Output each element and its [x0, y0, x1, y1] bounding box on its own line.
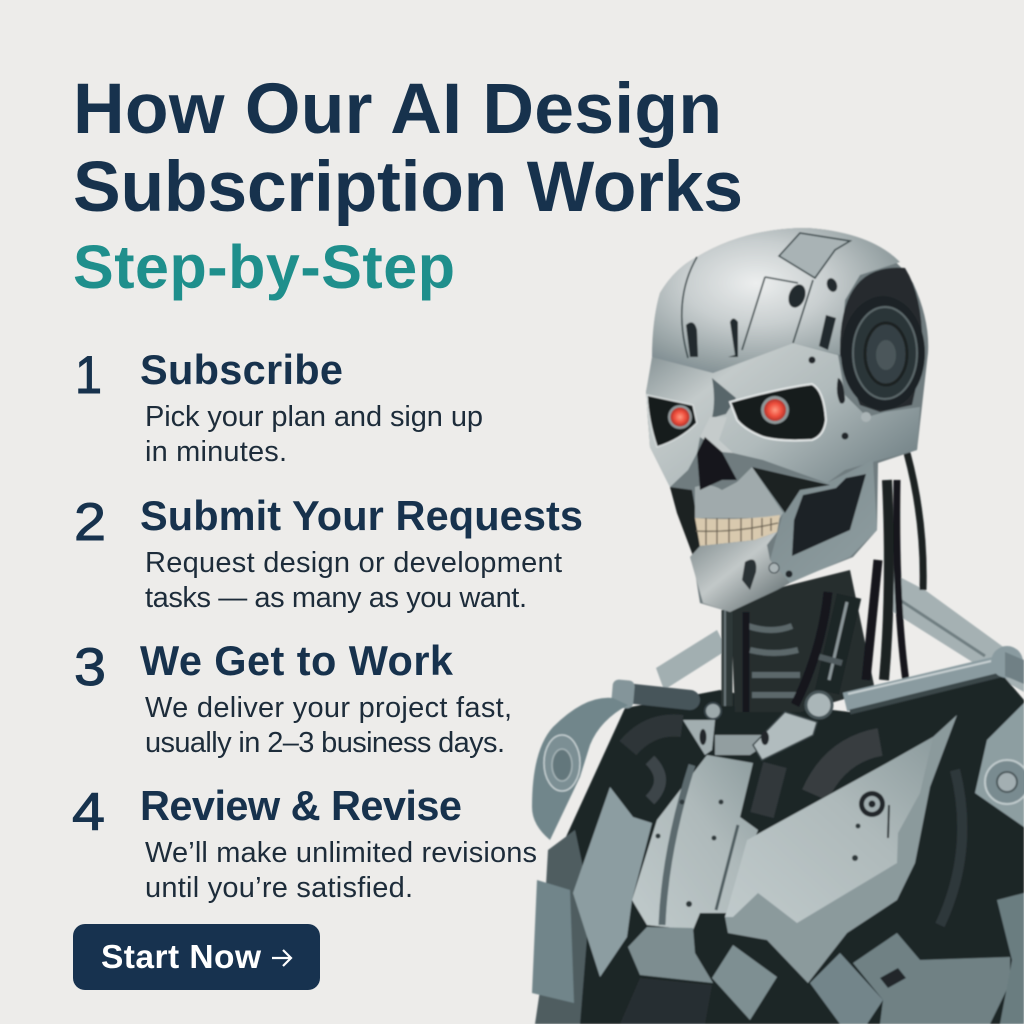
ear disc: [840, 268, 925, 412]
robot left upper arm: [532, 830, 590, 1024]
step 4: Review & Revise: [140, 782, 462, 829]
upper jaw: [695, 467, 783, 518]
title: [73, 69, 743, 227]
face plate: [646, 343, 920, 487]
step 4: We’ll make unlimited revisions: [145, 837, 537, 869]
step 2: [74, 492, 583, 614]
left eye glow: [668, 405, 692, 429]
robot neck: [725, 453, 923, 712]
head silhouette: [646, 228, 928, 612]
right eye socket: [730, 384, 826, 441]
step 1: 1: [75, 346, 102, 405]
title: Subscription Works: [73, 147, 743, 227]
step 4: until you’re satisfied.: [145, 872, 413, 904]
step 4: [72, 782, 537, 904]
cheek cavity: [752, 467, 830, 513]
robot right arm: [975, 703, 1024, 1024]
nasal cavity: [697, 437, 737, 490]
teeth: [695, 515, 780, 546]
step 2: Request design or development: [145, 547, 562, 579]
step 1: Pick your plan and sign up: [145, 401, 483, 433]
cranium vents: [686, 277, 839, 357]
robot right chest plate: [725, 715, 957, 983]
robot left chest panel: [573, 787, 652, 977]
step 1: in minutes.: [145, 436, 287, 468]
robot center chest panel: [632, 755, 758, 930]
robot head: [646, 228, 928, 612]
chin: [690, 532, 790, 612]
button: start now: [73, 924, 320, 990]
robot left shoulder: [532, 698, 628, 840]
left cheek wires: [670, 487, 704, 590]
robot torso core: [560, 672, 1024, 1024]
cranium seams: [682, 233, 850, 358]
subtitle: Step-by-Step: [73, 233, 455, 301]
brow shadow: [712, 378, 736, 418]
right eye glow: [761, 396, 789, 424]
step 3: [74, 637, 512, 759]
step 3: We deliver your project fast,: [145, 692, 512, 724]
illustration: robot: [532, 228, 1024, 1024]
step 2: Submit Your Requests: [140, 492, 583, 539]
robot lower left strap: [712, 945, 777, 1020]
button: start now: Start Now: [101, 939, 262, 976]
robot lower center plate: [628, 927, 713, 983]
robot lower right armor: [620, 933, 1010, 1024]
cranium: [652, 228, 900, 373]
step 3: 3: [74, 638, 106, 697]
left eye socket: [647, 395, 697, 447]
robot collar bars: [611, 646, 1024, 719]
step 4: 4: [72, 783, 105, 842]
step 2: tasks — as many as you want.: [145, 582, 527, 614]
cheek frame: [752, 460, 877, 583]
jaw bolts: [769, 356, 871, 578]
robot collar brackets: [683, 712, 817, 760]
step 2: 2: [74, 493, 106, 552]
title: How Our AI Design: [73, 69, 722, 149]
nose bridge: [700, 417, 733, 453]
step 3: usually in 2–3 business days.: [145, 727, 505, 759]
cheek inner dark: [792, 474, 866, 556]
chin cutout: [742, 560, 756, 590]
step 1: Subscribe: [140, 346, 343, 393]
step 3: We Get to Work: [140, 637, 454, 684]
robot back struts: [656, 572, 1024, 692]
step 1: [75, 346, 483, 468]
robot chest hoses: [628, 725, 962, 925]
